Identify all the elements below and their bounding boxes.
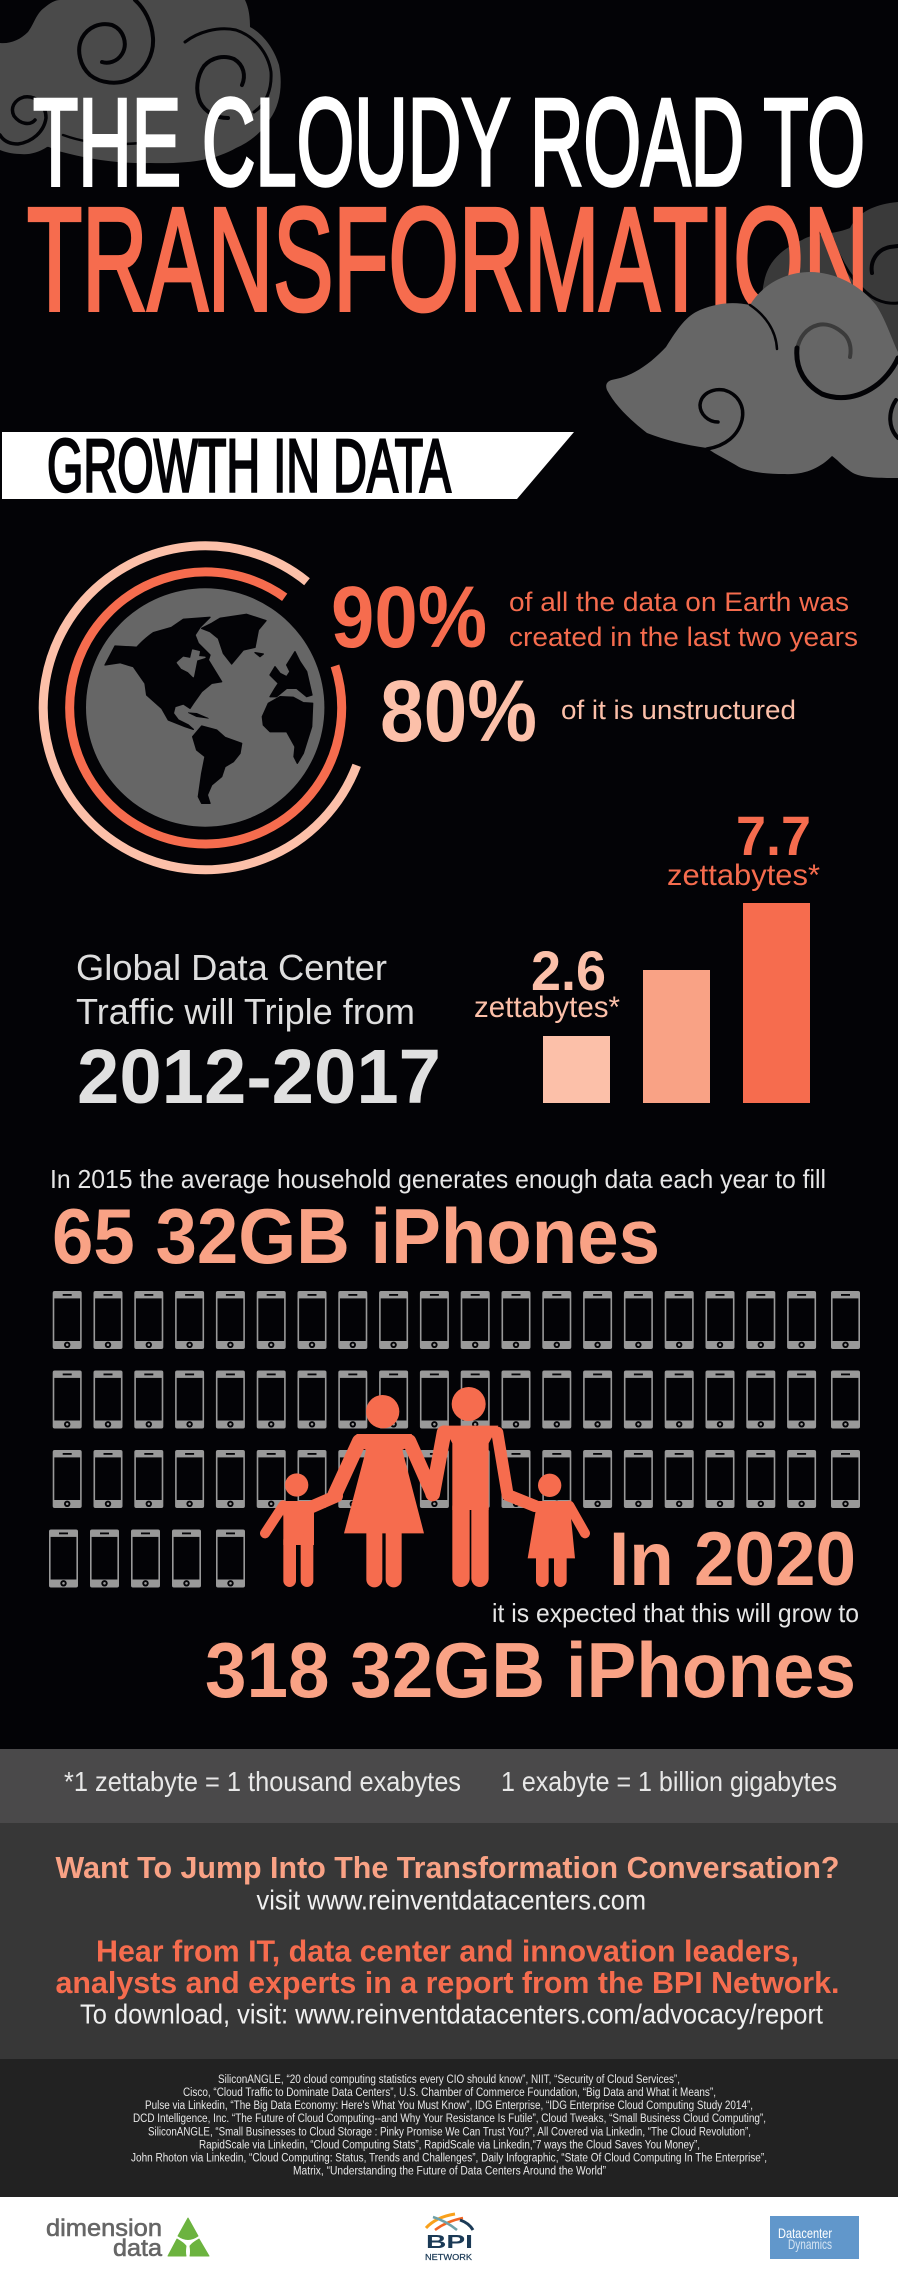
inner ring [70, 572, 342, 844]
household intro text: In 2015 the average household generates enough data each year to fill [50, 1164, 826, 1194]
globe with rings [43, 546, 357, 870]
growth text: it is expected that this will grow to [492, 1598, 859, 1628]
bar label: 2.6: 2.6 [531, 939, 606, 1002]
panel: sources [0, 2059, 898, 2197]
logo: dimension data [46, 2215, 209, 2262]
phone grid [49, 1291, 860, 1588]
stat description [509, 587, 858, 652]
report heading [56, 1934, 840, 2000]
logo: BPI network [425, 2214, 473, 2262]
bar chart: zettabytes [474, 804, 820, 1103]
heading: in 2020: In 2020 [609, 1517, 856, 1602]
panel: sources: DCD Intelligence, Inc. “The Future of Cloud Computing--and Why Your Resistance Is Futile”, Cloud Tweaks, “Small Business Cloud Computing”, [133, 2113, 766, 2125]
logo: datacenter dynamics [770, 2216, 859, 2259]
traffic heading [76, 947, 441, 1120]
panel: unit definitions: *1 zettabyte = 1 thousand exabytes [64, 1766, 461, 1797]
bar label: 7.7: zettabytes* [667, 859, 820, 892]
father [433, 1387, 535, 1578]
panel: unit definitions: 1 exabyte = 1 billion gigabytes [501, 1766, 837, 1797]
cloud: top left [0, 0, 281, 163]
panel: sponsor logos [0, 2197, 898, 2277]
stat: 80 percent [380, 663, 796, 760]
logo: datacenter dynamics: Dynamics [788, 2236, 832, 2252]
panel: sources: SiliconANGLE, “Small Businesses to Cloud Storage : Pinky Promise We Can Trust You?”, All Covered via Linkedin, “The Cloud Revolution”, [148, 2126, 751, 2138]
panel: sources: John Rhoton via Linkedin, “Cloud Computing: Status, Trends and Challenges”, Daily Infographic, “State Of Cloud Computing In The Enterprise”, [131, 2153, 767, 2165]
website link: visit www.reinventdatacenters.com [256, 1884, 646, 1916]
stat description: of it is unstructured [561, 695, 796, 725]
boy [265, 1473, 337, 1581]
panel: sources: RapidScale via Linkedin, “Cloud Computing Stats”, RapidScale via Linkedin,“7 ways the Cloud Saves You Money”, [199, 2140, 700, 2152]
heading: 318 iPhones: 318 32GB iPhones [205, 1626, 856, 1714]
panel: call to action [0, 1823, 898, 2059]
bar label: 7.7: 7.7 [736, 804, 811, 867]
stat description: created in the last two years [509, 622, 858, 652]
logo: BPI network: NETWORK [425, 2253, 473, 2262]
girl [528, 1474, 585, 1581]
year range: 2012-2017 [77, 1034, 441, 1120]
stat: 90 percent: 90% [331, 569, 487, 666]
panel: sources: Pulse via Linkedin, “The Big Data Economy: Here's What You Must Know”, IDG Enterprise, “IDG Enterprise Cloud Computing Study 2014”, [145, 2100, 753, 2112]
icon: family [265, 1387, 585, 1581]
cloud: right back layer [762, 202, 898, 420]
traffic heading: Global Data Center [76, 947, 387, 988]
phone row four [49, 1530, 245, 1588]
logo: datacenter dynamics: Datacenter [778, 2225, 832, 2241]
title [27, 74, 869, 342]
logo: dimension data: data [113, 2235, 163, 2262]
outer ring [43, 546, 357, 870]
cloud: right front layer [606, 272, 898, 478]
panel: sources: SiliconANGLE, “20 cloud computing statistics every CIO should know”, NIIT, “Security of Cloud Services”, [218, 2074, 680, 2086]
stat: 90 percent [331, 569, 858, 666]
logo: dimension data: dimension [46, 2215, 162, 2242]
globe [86, 588, 324, 827]
report heading: Hear from IT, data center and innovation leaders, [96, 1934, 799, 1968]
phone row three [53, 1450, 860, 1508]
section banner: growth in data [2, 424, 574, 508]
logo: BPI network: BPI [426, 2232, 473, 2252]
panel: sources: Matrix, “Understanding the Future of Data Centers Around the World” [293, 2166, 606, 2178]
panel: sources: Cisco, “Cloud Traffic to Dominate Data Centers”, U.S. Chamber of Commerce Foundation, “Big Data and What it Means”, [183, 2087, 716, 2099]
stat: 80 percent: 80% [380, 663, 537, 760]
bar label: 7.7 [667, 804, 820, 892]
bar label: 2.6: zettabytes* [474, 991, 620, 1024]
call to action heading: Want To Jump Into The Transformation Conversation? [56, 1850, 840, 1885]
traffic heading: Traffic will Triple from [76, 991, 415, 1032]
download link: To download, visit: www.reinventdatacenters.com/advocacy/report [80, 1998, 823, 2030]
mother [335, 1395, 433, 1579]
section heading: GROWTH IN DATA [47, 424, 451, 508]
phone row two [53, 1370, 860, 1428]
stat description: of all the data on Earth was [509, 587, 849, 617]
phone row one [53, 1291, 860, 1349]
panel: unit definitions [0, 1749, 898, 1823]
heading: 65 iPhones: 65 32GB iPhones [52, 1192, 660, 1280]
bar label: 2.6 [474, 939, 620, 1024]
report heading: analysts and experts in a report from the BPI Network. [56, 1965, 840, 2000]
